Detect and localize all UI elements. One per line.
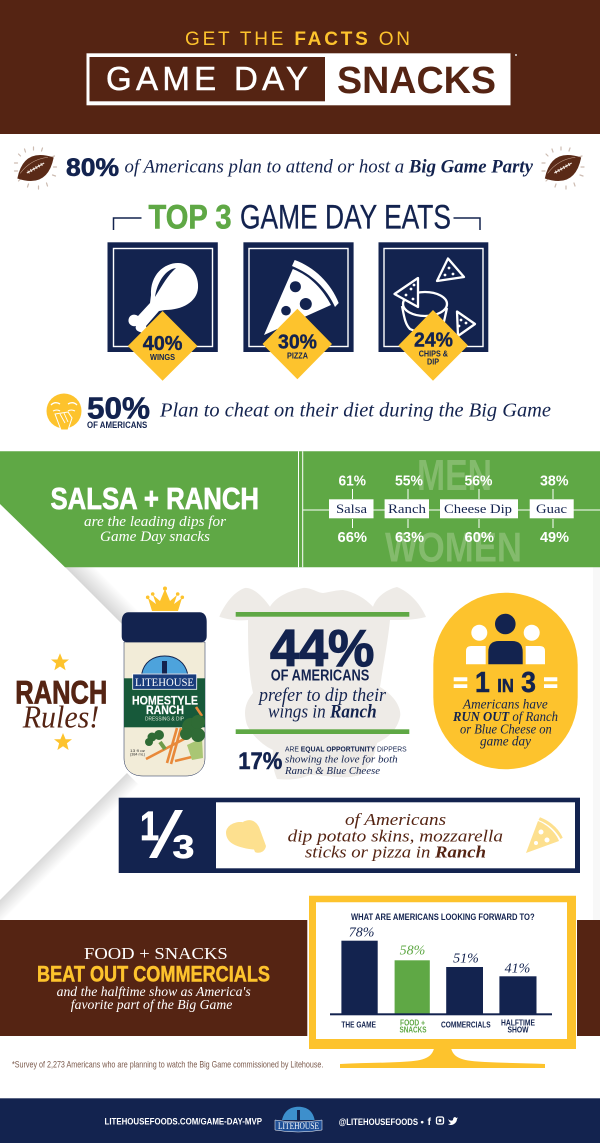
badge: 40 percent wings: WINGS [150,352,175,362]
ran out statement: or Blue Cheese on [460,721,552,736]
equal opportunity statement: ARE EQUAL OPPORTUNITY DIPPERS [285,745,407,754]
jar logo [133,656,197,689]
band subheading: favorite part of the Big Game [71,998,232,1013]
footer url: LITEHOUSEFOODS.COM/GAME-DAY-MVP [104,1116,263,1127]
one third figure: 1 [140,803,159,849]
heading: top 3 game day eats: TOP 3 [148,198,232,236]
jar label text: RANCH [146,703,184,717]
footnote: *Survey of 2,273 Americans who are planning to watch the Big Game commissioned by Litehouse. [12,1060,323,1070]
value labels: 58% [400,943,425,958]
panel: 1 in 3 ran out [433,593,578,769]
party statement: of Americans plan to attend or host a Big Game Party [124,157,534,178]
of americans label: OF AMERICANS [271,668,370,685]
jar body [124,642,205,776]
dip labels [329,499,574,518]
badge: 24 percent chips and dip: DIP [427,356,439,366]
heading: top 3 game day eats [114,198,480,236]
badge: 30 percent pizza: 30% [278,331,317,353]
badge: 24 percent chips and dip [398,310,468,381]
panel: salsa and ranch band [0,451,600,571]
band highlight: BEAT OUT COMMERCIALS [37,962,270,987]
heading: top 3 game day eats: GAME DAY EATS [240,198,451,236]
kicker heading: GET THE FACTS ON [185,29,410,50]
tv frame [309,896,576,1049]
icon: football left [11,147,60,189]
ran out statement: RUN OUT of Ranch [452,709,558,724]
title lockup: GAME DAY [106,60,308,97]
category labels: FOOD + [400,1018,425,1028]
ranch statement: of Americans [345,810,446,829]
title lockup: SNACKS [337,60,496,102]
footer logo: LITEHOUSE [278,1121,319,1131]
icon: crown [146,586,184,615]
one third figure: 3 [173,829,194,865]
jar vegetables: 13 fl oz [130,749,145,753]
men percentages [338,473,568,490]
category labels: SHOW [508,1025,529,1035]
category labels [341,1018,535,1035]
50 percent figure: 50% [87,390,150,425]
footer social handle: f [428,1116,432,1128]
band subheading: Game Day snacks [100,529,210,545]
ran out statement: game day [480,734,531,749]
panel: 44 percent wings in ranch [219,587,426,780]
panel: pizza [243,242,354,379]
tv bar chart [309,896,576,1068]
badge: 40 percent wings: 40% [143,333,183,355]
band heading: SALSA + RANCH [50,481,259,516]
panel: one third dip in ranch [119,798,580,873]
footer logo [275,1107,322,1132]
category labels: HALFTIME [501,1018,535,1028]
heading: ranch rules [15,653,107,750]
ran out statement: Americans have [462,696,548,711]
chart title: WHAT ARE AMERICANS LOOKING FORWARD TO? [351,912,535,923]
ranch statement [288,810,503,861]
band subheading: and the halftime show as America's [57,985,251,1000]
jar logo: LITEHOUSE [135,675,194,689]
jar vegetables: (384 mL) [130,752,145,756]
women percentages: 49% [540,529,569,546]
chicken silhouette [219,587,426,780]
band subheading [57,985,251,1013]
women percentages: 60% [464,529,494,546]
icon: potato skins [226,820,266,853]
icon: drumstick [128,263,198,333]
women percentages [338,529,569,546]
diet statement: Plan to cheat on their diet during the Big Game [159,400,551,422]
wings statement [257,685,387,723]
decorative ghost labels [385,451,522,571]
badge: 24 percent chips and dip: 24% [414,330,453,352]
category labels: THE GAME [341,1020,376,1030]
jar lid [122,612,207,642]
44 percent figure: 44% [270,620,374,678]
icon: people [466,614,545,664]
fold shadow [0,567,600,920]
men percentages: 38% [540,473,568,490]
title lockup [86,53,517,105]
category labels: COMMERCIALS [441,1020,491,1030]
footer social handle: • [420,1117,424,1128]
badge: 24 percent chips and dip: CHIPS & [419,349,448,359]
badge: 30 percent pizza: PIZZA [287,350,308,360]
1 in 3 figure: 1 IN 3 [475,667,536,699]
men percentages: 55% [395,473,423,490]
icon: football right [539,147,587,189]
icon: face covering mouth [46,394,82,430]
badge: 30 percent pizza [262,309,332,379]
tv stand [340,1047,545,1068]
bars [330,941,552,1015]
men percentages: 61% [338,473,366,490]
header banner [0,0,600,134]
decorative ghost labels: WOMEN [385,524,522,571]
stat: 80 percent party [11,147,587,189]
ranch statement: dip potato skins, mozzarella [288,827,503,846]
jar label text [132,693,198,722]
stat: 50 percent cheat on diet: OF AMERICANS [87,420,147,430]
jar vegetables [130,707,205,764]
ranch statement: sticks or pizza in Ranch [305,842,486,861]
jar label text: DRESSING & DIP [145,716,185,722]
band heading: FOOD + SNACKS [84,944,228,963]
wings statement: prefer to dip their [257,685,387,706]
dip labels: Guac [536,501,567,516]
equal opportunity statement: Ranch & Blue Cheese [284,765,380,777]
icon: pizza slice [264,260,339,335]
category labels: SNACKS [400,1025,427,1035]
footer social handle: @LITEHOUSEFOODS [339,1117,418,1128]
women percentages: 66% [338,529,367,546]
dip labels: Ranch [388,501,427,516]
heading: ranch rules: Rules! [22,698,99,734]
heading: ranch rules: RANCH [15,674,107,710]
women percentages: 63% [395,529,424,546]
ranch jar [122,586,207,776]
equal opportunity statement: showing the love for both [285,754,398,766]
equal opportunity statement [284,745,407,777]
panel: chips and dip [378,242,488,381]
value labels: 51% [453,951,479,966]
value labels: 78% [349,926,374,941]
icon: pizza slice pale [526,817,563,853]
badge: 40 percent wings [128,311,198,381]
ran out statement [452,696,558,749]
green rule bottom [236,729,409,734]
value labels [349,926,530,976]
men percentages: 56% [464,473,492,490]
panel: food and snacks band [0,920,600,1036]
band subheading: are the leading dips for [84,514,226,530]
1 in 3 figure [454,667,557,699]
dip labels: Salsa [336,501,367,516]
icon: chips and dip [394,258,475,336]
80 percent figure: 80% [66,154,119,182]
green rule top [236,612,409,617]
jar label text: HOMESTYLE [132,693,198,707]
value labels: 41% [505,961,530,976]
panel: wings [108,242,218,381]
dip labels: Cheese Dip [444,501,512,516]
decorative ghost labels: MEN [417,451,492,500]
footer [0,1098,600,1143]
wings statement: wings in Ranch [268,702,377,723]
17 percent figure: 17% [238,748,282,775]
band subheading [84,514,226,545]
stat: 50 percent cheat on diet [46,390,551,430]
one third figure [140,803,194,865]
